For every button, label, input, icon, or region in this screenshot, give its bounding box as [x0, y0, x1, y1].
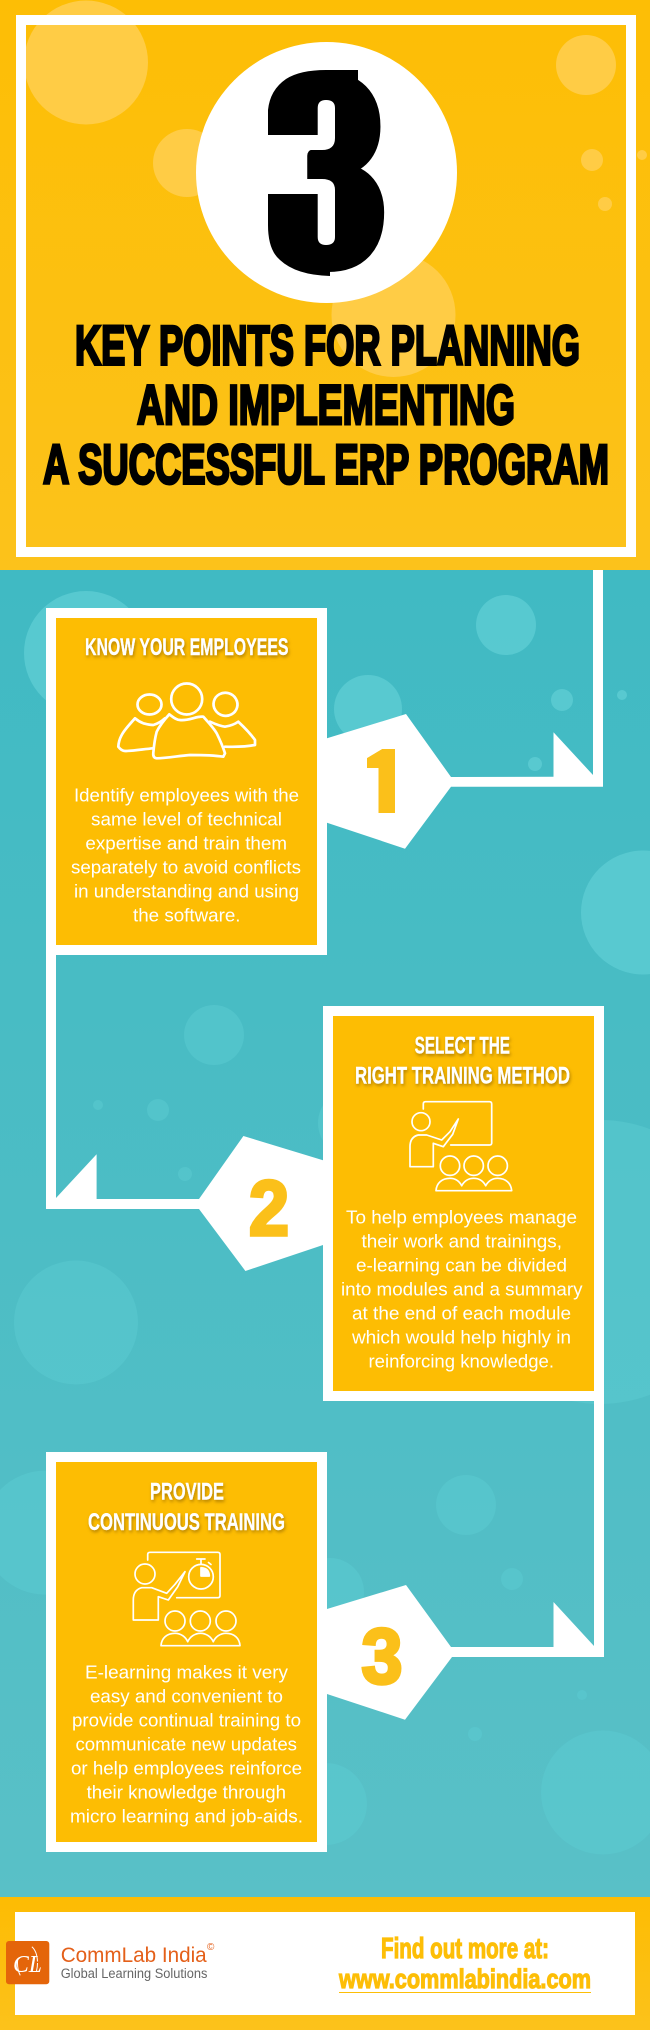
- step 2 heading: [355, 1032, 570, 1089]
- logo wordmark: ©: [207, 1942, 215, 1953]
- step 2 body text: into modules and a summary: [341, 1280, 582, 1300]
- step 2 body text: [341, 1208, 582, 1372]
- panel: step 1 card: [46, 608, 327, 955]
- step 3 heading: PROVIDE: [150, 1479, 224, 1506]
- panel: step 2 card: [323, 1006, 604, 1401]
- step 3 heading: [88, 1479, 285, 1536]
- step 2 body text: reinforcing knowledge.: [368, 1352, 554, 1372]
- call to action: www.commlabindia.com: [338, 1964, 591, 1994]
- step 2 number: 2: [249, 1164, 289, 1252]
- call to action: Find out more at:: [381, 1933, 549, 1965]
- step 3 body text: E-learning makes it very: [85, 1662, 288, 1682]
- panel: header: [0, 0, 650, 570]
- icon: group of employees: [118, 684, 255, 758]
- arrow: connector into step 1: [327, 570, 603, 849]
- step 2 body text: their work and trainings,: [362, 1232, 562, 1252]
- logo wordmark: CommLab India: [61, 1943, 207, 1967]
- icon: trainer with stopwatch and audience: [133, 1552, 240, 1646]
- step 3 body text: or help employees reinforce: [71, 1758, 302, 1778]
- logo wordmark: [61, 1942, 215, 1981]
- step 1 body text: Identify employees with the: [74, 786, 299, 806]
- title: [43, 314, 609, 496]
- step 2 body text: To help employees manage: [346, 1208, 577, 1228]
- step 3 heading: CONTINUOUS TRAINING: [88, 1509, 285, 1536]
- step 1 number: [367, 749, 395, 813]
- panel: teal steps background: [0, 570, 650, 1898]
- step 1 body text: in understanding and using: [74, 882, 299, 902]
- arrow: connector into step 3: [327, 1401, 604, 1720]
- panel: footer: [0, 1897, 650, 2030]
- step 3 body text: their knowledge through: [87, 1782, 286, 1802]
- white circle with big number 3: 3: [270, 24, 387, 320]
- step 2 body text: at the end of each module: [352, 1304, 571, 1324]
- step 3 body text: easy and convenient to: [90, 1686, 283, 1706]
- step 3 body text: [70, 1662, 303, 1826]
- white circle with big number 3: [196, 24, 457, 320]
- step 1 heading: KNOW YOUR EMPLOYEES: [85, 634, 288, 661]
- step 2 body text: which would help highly in: [351, 1328, 571, 1348]
- step 3 number: 3: [362, 1612, 402, 1700]
- call to action: [338, 1933, 591, 1994]
- step 1 body text: [71, 786, 301, 926]
- step 3 body text: micro learning and job-aids.: [70, 1806, 303, 1826]
- icon: trainer at whiteboard with audience: [410, 1102, 512, 1191]
- step 1 body text: separately to avoid conflicts: [71, 858, 301, 878]
- arrow: connector into step 2: [46, 955, 323, 1271]
- icon: CommLab logo mark: CL: [13, 1952, 42, 1978]
- step 2 heading: SELECT THE: [415, 1032, 510, 1059]
- step 3 body text: communicate new updates: [76, 1734, 297, 1754]
- step 1 body text: same level of technical: [91, 810, 282, 830]
- step 2 body text: e-learning can be divided: [356, 1256, 567, 1276]
- step 3 body text: provide continual training to: [72, 1710, 301, 1730]
- step 1 body text: expertise and train them: [85, 834, 287, 854]
- step 1 number: 1: [362, 740, 414, 828]
- step 1 body text: the software.: [133, 906, 240, 926]
- panel: step 3 card: [46, 1452, 327, 1852]
- logo wordmark: Global Learning Solutions: [61, 1966, 208, 1981]
- icon: CommLab logo mark: [6, 1941, 49, 1984]
